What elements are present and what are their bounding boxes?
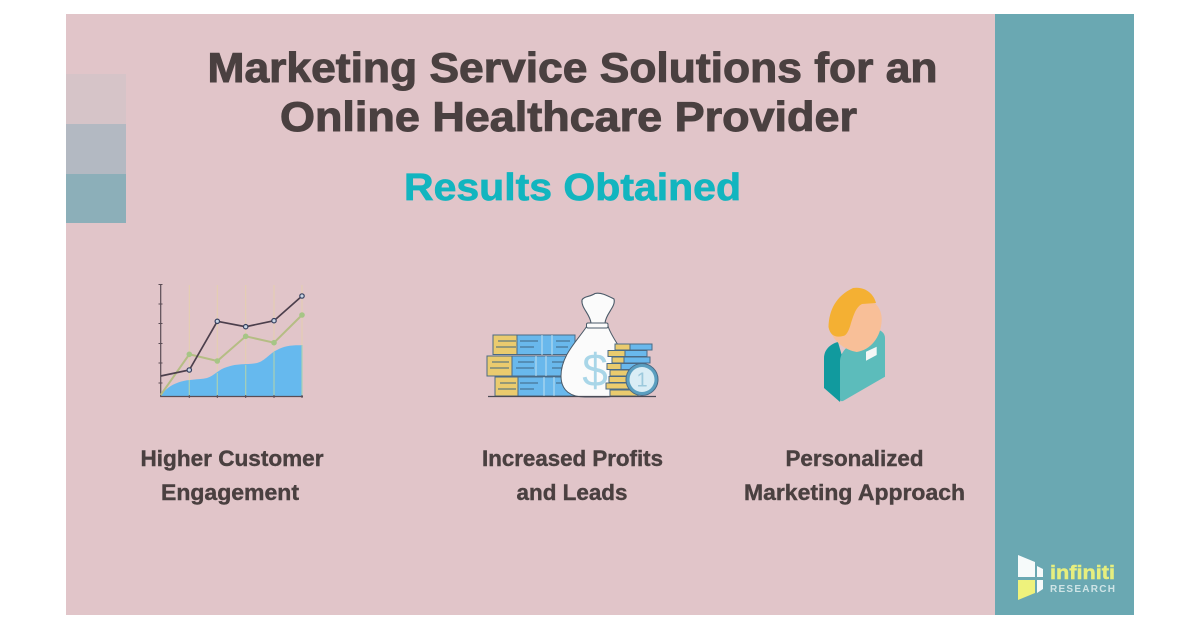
money bag tie <box>586 323 608 328</box>
logo mark <box>1018 555 1043 600</box>
person hair <box>828 288 876 337</box>
person torso front <box>840 329 885 401</box>
banknote details <box>490 335 570 396</box>
label: increased profits and leads: Increased Profits <box>482 446 663 471</box>
money bag dollar sign: $ <box>582 344 608 396</box>
label: personalized marketing approach <box>744 446 965 505</box>
label: personalized marketing approach: Personalized <box>786 446 924 471</box>
label: higher customer engagement <box>140 446 324 505</box>
icon: line and area chart <box>158 284 305 398</box>
chart area highlights <box>189 345 302 396</box>
title: Online Healthcare Provider <box>280 93 857 140</box>
label: higher customer engagement: Engagement <box>161 480 300 505</box>
money bag neck <box>582 293 614 323</box>
label: personalized marketing approach: Marketing Approach <box>744 480 965 505</box>
panel: teal sidebar <box>995 14 1134 615</box>
logo wordmark: infiniti <box>1050 563 1115 584</box>
title: Marketing Service Solutions for an <box>208 44 937 91</box>
banknote stacks <box>487 335 575 396</box>
panel: pink background <box>66 14 996 615</box>
label: increased profits and leads <box>482 446 663 505</box>
chart area series <box>161 345 302 396</box>
money bag body <box>561 326 628 397</box>
person badge <box>866 347 877 361</box>
ground line <box>488 396 656 398</box>
chart dark line <box>161 294 304 376</box>
title <box>208 44 937 140</box>
logo: infiniti research <box>1018 555 1115 600</box>
chart axes <box>158 284 303 398</box>
subtitle: results obtained: Results Obtained <box>404 167 741 209</box>
chart gridlines <box>189 285 302 396</box>
coin with number one: 1 <box>636 370 648 392</box>
chart green line <box>161 312 305 395</box>
icon: isometric person <box>824 288 885 402</box>
icon: money bag with banknotes and coins <box>487 293 658 397</box>
coin stack <box>606 344 652 396</box>
decorative colour swatches <box>66 74 126 223</box>
person torso side <box>824 342 846 402</box>
coin with number one <box>626 364 658 396</box>
logo tagline: RESEARCH <box>1050 584 1115 595</box>
label: higher customer engagement: Higher Customer <box>140 446 324 471</box>
label: increased profits and leads: and Leads <box>516 480 628 505</box>
person face <box>830 298 882 352</box>
